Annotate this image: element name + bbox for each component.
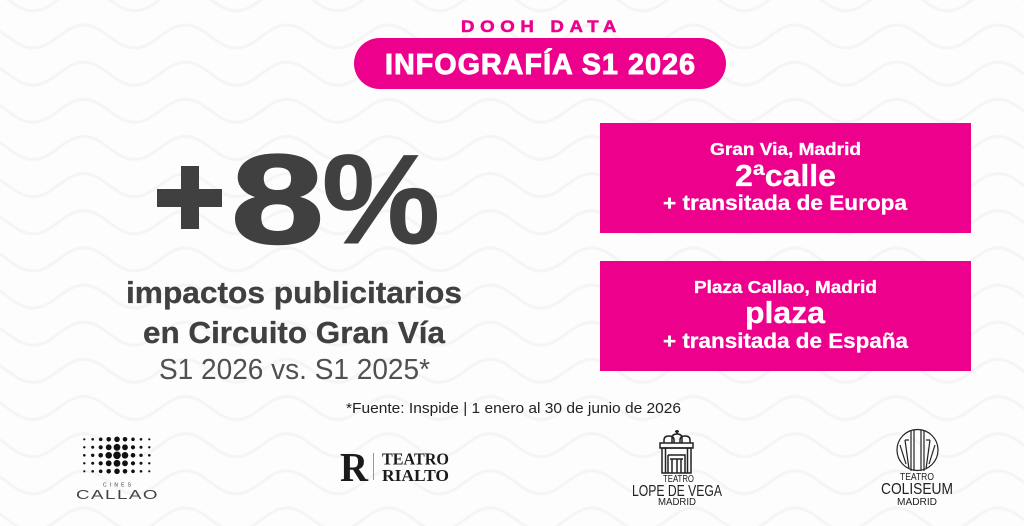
logo: Teatro Coliseum: TEATRO xyxy=(900,472,934,483)
panel: Gran Via: 2ªcalle xyxy=(735,158,836,193)
logo: Teatro Lope de Vega xyxy=(632,430,723,508)
logo: Teatro Coliseum: MADRID xyxy=(897,496,937,508)
panel: Plaza Callao: + transitada de España xyxy=(663,330,908,353)
logo: Teatro Coliseum: COLISEUM xyxy=(881,481,953,498)
big stat: +8%: % xyxy=(322,128,440,270)
title: Infografía S1 2026: INFOGRAFÍA S1 2026 xyxy=(385,49,695,81)
logo: Teatro Rialto: TEATRO xyxy=(382,450,449,468)
panel: Plaza Callao: Plaza Callao, Madrid xyxy=(694,277,877,297)
logo: Cines Callao: CINES xyxy=(103,482,132,488)
logo: Teatro Lope de Vega: TEATRO xyxy=(663,474,694,485)
logo: Teatro Lope de Vega: LOPE DE VEGA xyxy=(632,483,723,500)
panel: Plaza Callao: plaza xyxy=(745,295,826,330)
stat description xyxy=(126,275,462,386)
panel: Gran Via: Gran Via, Madrid xyxy=(710,139,861,159)
logo: Teatro Rialto xyxy=(340,444,449,490)
stat description: impactos publicitarios xyxy=(126,275,462,310)
source note: *Fuente: Inspide | 1 enero al 30 de junio de 2026 xyxy=(346,400,681,417)
panel: Gran Via xyxy=(600,123,971,233)
stat description: S1 2026 vs. S1 2025* xyxy=(159,354,430,386)
panel: Gran Via: + transitada de Europa xyxy=(663,192,907,215)
big stat: +8% xyxy=(157,128,440,270)
logo: Teatro Coliseum xyxy=(881,430,953,508)
panel: Plaza Callao xyxy=(600,261,971,371)
logo: Teatro Rialto: R xyxy=(340,444,368,490)
logo: Teatro Rialto: RIALTO xyxy=(382,466,449,485)
logo: Cines Callao xyxy=(76,436,159,502)
stat description: en Circuito Gran Vía xyxy=(143,315,446,350)
logo: Cines Callao: CALLAO xyxy=(76,488,159,502)
eyebrow: DOOH DATA: DOOH DATA xyxy=(461,18,622,36)
title pill xyxy=(354,38,726,89)
big stat: +8%: 8 xyxy=(231,128,324,270)
logo: Teatro Lope de Vega: MADRID xyxy=(658,497,696,508)
